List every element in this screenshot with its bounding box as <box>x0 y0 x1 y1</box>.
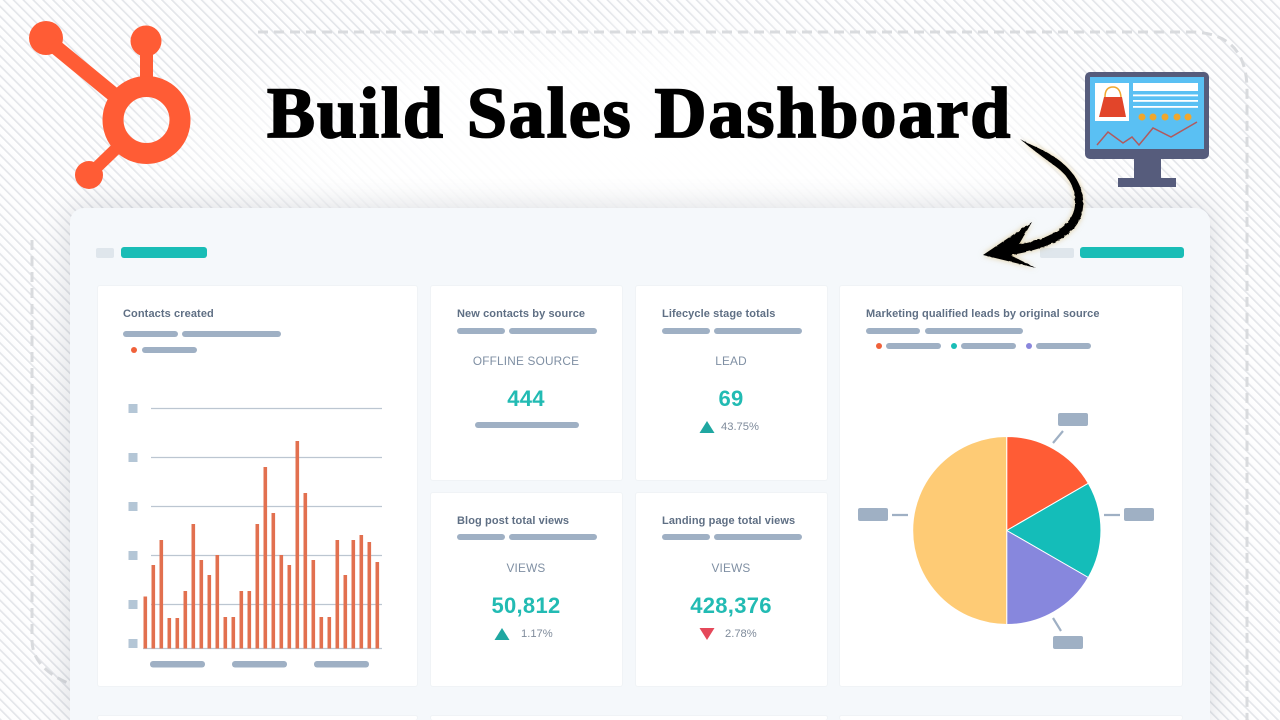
icon: monitor with shopping bag <box>1085 72 1209 187</box>
pie chart <box>858 413 1154 649</box>
panel: marketing qualified leads <box>839 285 1183 687</box>
title: Build Sales Dashboard <box>267 73 1012 153</box>
panel: landing page total views <box>635 492 828 687</box>
bar chart: contacts created <box>128 404 382 668</box>
subtitle placeholders <box>662 328 802 334</box>
panel: contacts created <box>97 285 418 687</box>
change: 43.75%: 43.75% <box>721 421 759 433</box>
icon: down triangle <box>700 628 714 640</box>
value: 69: 69 <box>718 386 744 411</box>
header placeholder bars <box>96 247 1184 258</box>
heading: blog post: Blog post total views <box>457 515 569 527</box>
panel: lifecycle stage totals <box>635 285 828 481</box>
label: lead: LEAD <box>715 354 747 368</box>
bottom row cards <box>98 716 1182 720</box>
heading: contacts created: Contacts created <box>123 308 214 320</box>
change: 1.17%: 1.17% <box>521 628 553 640</box>
heading: lifecycle: Lifecycle stage totals <box>662 308 775 320</box>
subtitle placeholders <box>457 534 597 540</box>
heading: landing page: Landing page total views <box>662 515 795 527</box>
subtitle and legend placeholders <box>866 328 1091 349</box>
panel: blog post total views <box>430 492 623 687</box>
value: 428,376: 428,376 <box>690 593 772 618</box>
heading: new contacts: New contacts by source <box>457 308 585 320</box>
dashboard panel <box>70 208 1210 720</box>
change: 2.78%: 2.78% <box>725 628 757 640</box>
value: 50,812: 50,812 <box>491 593 561 618</box>
subtitle placeholders <box>662 534 802 540</box>
subtitle placeholders <box>123 331 281 353</box>
label: views: VIEWS <box>711 561 751 575</box>
label: offline source: OFFLINE SOURCE <box>473 354 579 368</box>
arrow <box>982 139 1087 270</box>
icon: up triangle <box>494 628 510 640</box>
label: views: VIEWS <box>506 561 546 575</box>
icon: hubspot logo <box>29 21 190 189</box>
value: 444: 444 <box>507 386 545 411</box>
icon: up triangle <box>700 421 714 433</box>
panel: new contacts by source <box>430 285 623 481</box>
placeholder bar <box>475 422 579 428</box>
subtitle placeholders <box>457 328 597 334</box>
heading: marketing qualified leads: Marketing qualified leads by original source <box>866 308 1100 320</box>
